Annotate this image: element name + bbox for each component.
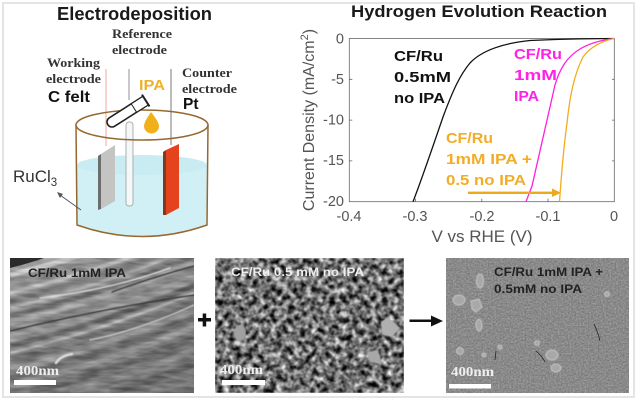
scale bar 1 xyxy=(14,364,59,385)
x axis tick labels: -0.1 xyxy=(536,209,560,225)
y axis tick labels: -10 xyxy=(323,112,344,128)
label: working electrode xyxy=(46,55,101,86)
working electrode C felt xyxy=(98,69,115,210)
label: black series: 0.5mM xyxy=(394,69,451,86)
label: reference electrode: electrode xyxy=(112,42,167,57)
reference electrode xyxy=(126,69,133,206)
label: black series: CF/Ru xyxy=(394,48,443,65)
label: counter electrode: Counter xyxy=(182,65,232,80)
label: magenta series: CF/Ru xyxy=(514,46,562,63)
x axis tick labels xyxy=(336,209,618,225)
label: C felt: C felt xyxy=(48,89,91,106)
arrow: RuCl3 pointer xyxy=(57,192,81,210)
label: counter electrode: electrode xyxy=(182,81,237,96)
label: orange series: 1mM IPA + xyxy=(446,151,532,168)
panel: electrochemical cell xyxy=(13,26,237,236)
heading: Electrodeposition: Electrodeposition xyxy=(57,4,212,24)
x axis tick labels: -0.2 xyxy=(470,209,494,225)
label: Pt: Pt xyxy=(183,96,198,113)
label: reference electrode xyxy=(112,26,172,57)
y axis title: ) xyxy=(301,29,318,34)
label: reference electrode: Reference xyxy=(112,26,172,41)
scale bar 2: 400nm xyxy=(220,363,263,378)
label: counter electrode xyxy=(182,65,237,96)
label: RuCl3: RuCl xyxy=(13,167,51,186)
y axis title: Current Density (mA/cm xyxy=(301,40,318,211)
label: RuCl3: 3 xyxy=(51,177,57,189)
label: working electrode: electrode xyxy=(46,71,101,86)
x axis tick labels: 0 xyxy=(610,209,618,225)
heading: Hydrogen Evolution Reaction: Hydrogen Evolution Reaction xyxy=(351,2,607,21)
scale bar 3 xyxy=(449,365,494,388)
panel: SEM image combined xyxy=(446,258,629,393)
icon: plus xyxy=(198,314,211,326)
curve: orange CF/Ru 1mM IPA + 0.5 no IPA xyxy=(560,38,614,202)
label: image 3 title: 0.5mM no IPA xyxy=(494,282,582,296)
scale bar 1: 400nm xyxy=(16,364,59,379)
y axis tick labels: 0 xyxy=(336,32,344,48)
y axis tick labels: -5 xyxy=(331,72,344,88)
x axis title: V vs RHE (V) xyxy=(431,227,533,246)
scale bar 3: 400nm xyxy=(451,365,494,380)
y axis tick labels: -15 xyxy=(323,153,344,169)
label: image 2 title: CF/Ru 0.5 mM no IPA xyxy=(231,265,364,279)
label: IPA: IPA xyxy=(139,77,165,94)
y axis title: 2 xyxy=(299,34,311,40)
panel: SEM image CF/Ru 1mM IPA xyxy=(10,258,194,393)
x axis tick labels: -0.4 xyxy=(336,209,362,225)
label: magenta series: 1mM xyxy=(514,67,557,84)
label: orange series xyxy=(446,130,532,189)
label: black series xyxy=(394,48,451,107)
label: working electrode: Working xyxy=(47,55,101,70)
label: magenta series xyxy=(514,46,562,105)
label: image 3 title xyxy=(494,265,603,296)
arrow: shift xyxy=(468,188,561,197)
y axis tick labels xyxy=(323,32,344,210)
label: black series: no IPA xyxy=(394,90,445,107)
chart: polarization curves xyxy=(299,29,618,246)
icon: IPA drop xyxy=(144,112,159,134)
curve: magenta CF/Ru 1mM IPA xyxy=(526,38,614,202)
y axis tick labels: -20 xyxy=(323,194,344,210)
label: image 3 title: CF/Ru 1mM IPA + xyxy=(494,265,603,279)
arrow: to combined xyxy=(410,316,443,326)
beaker xyxy=(76,110,208,236)
label: orange series: CF/Ru xyxy=(446,130,493,147)
curve: black CF/Ru 0.5mM no IPA xyxy=(413,38,614,202)
label: orange series: 0.5 no IPA xyxy=(446,172,526,189)
panel: SEM image CF/Ru 0.5 mM no IPA xyxy=(215,258,404,393)
icon: pipette xyxy=(104,95,149,131)
counter electrode Pt xyxy=(163,69,179,215)
x axis tick labels: -0.3 xyxy=(402,209,428,225)
scale bar 2 xyxy=(220,363,265,385)
solution xyxy=(77,165,207,236)
label: magenta series: IPA xyxy=(514,88,539,105)
label: image 1 title: CF/Ru 1mM IPA xyxy=(28,266,126,280)
